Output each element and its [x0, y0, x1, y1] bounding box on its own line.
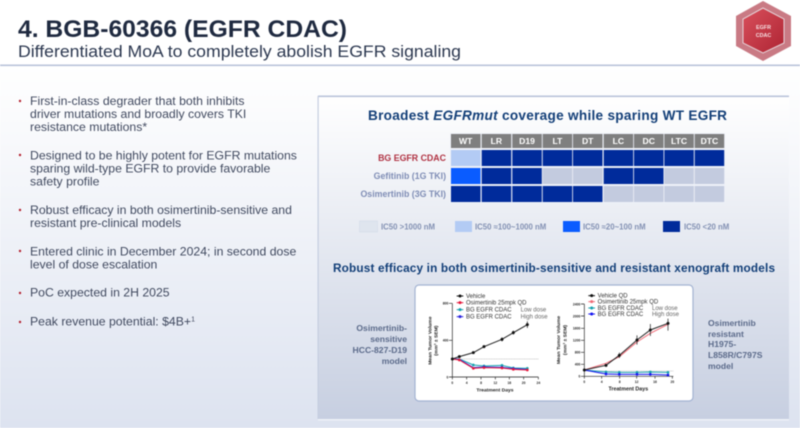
chart: osimertinib-resistant tumor volume: 400: [575, 363, 580, 367]
column headers: LR: [491, 136, 503, 146]
label: sensitive model: HCC-827-D19: [353, 345, 407, 355]
chart legend: Osimertinib 25mpk QD: [466, 301, 527, 307]
row: Osimertinib: Osimertinib (3G TKI): [360, 189, 446, 199]
chart: osimertinib-resistant tumor volume: 1600: [573, 327, 580, 331]
chart: osimertinib-sensitive tumor volume: 4: [466, 381, 468, 385]
heading: xenograft: Robust efficacy in both osimertinib-sensitive and resistant xenograft models: [333, 261, 775, 275]
icon: EGFR CDAC hexagon badge: EGFR: [756, 25, 771, 31]
label: sensitive model: Osimertinib-: [356, 323, 407, 333]
chart: osimertinib-sensitive tumor volume: 0: [446, 375, 448, 379]
bullet: designed to be potent: Designed to be highly potent for EGFR mutations: [30, 148, 297, 162]
chart: osimertinib-sensitive tumor volume: 800: [443, 302, 448, 306]
bullet: entered clinic: Entered clinic in December 2024; in second dose: [30, 244, 296, 258]
icon: EGFR CDAC hexagon badge: CDAC: [756, 33, 771, 39]
heatmap legend: [360, 221, 729, 232]
panel: chart card: [415, 285, 693, 401]
chart: osimertinib-sensitive tumor volume: 0: [451, 381, 453, 385]
column headers: D19: [519, 136, 535, 146]
subtitle: Differentiated MoA to completely abolish EGFR signaling: [18, 42, 461, 61]
chart: osimertinib-resistant tumor volume: 8: [619, 380, 621, 384]
bullet: designed to be potent: [19, 148, 297, 188]
chart: osimertinib-resistant tumor volume: (mm³ ± SEM): [563, 325, 569, 355]
column headers: DTC: [701, 136, 718, 146]
bullet: entered clinic: [19, 244, 296, 272]
column headers: [451, 134, 724, 148]
chart legend: Low dose: [652, 306, 678, 312]
chart legend: [588, 294, 680, 318]
column headers: LC: [613, 136, 624, 146]
chart: osimertinib-sensitive tumor volume: Mean Tumor Volume: [427, 316, 433, 365]
chart legend: BG EGFR CDAC: [598, 306, 644, 312]
label: resistant model: Osimertinib: [708, 318, 756, 328]
bullet: robust efficacy: resistant pre-clinical models: [30, 216, 181, 230]
bullet: first-in-class: First-in-class degrader that both inhibits: [30, 94, 244, 108]
chart legend: BG EGFR CDAC: [598, 312, 644, 318]
bullet: peak revenue: 1: [191, 316, 195, 324]
label: resistant model: H1975-: [708, 339, 736, 349]
heatmap table: [360, 133, 725, 203]
chart legend: High dose: [652, 312, 680, 318]
chart: osimertinib-sensitive tumor volume: 8: [480, 381, 482, 385]
heatmap legend: IC50 <20 nM: [684, 222, 729, 232]
icon: EGFR CDAC hexagon badge: [736, 1, 791, 61]
chart: osimertinib-resistant tumor volume: 20: [670, 380, 674, 384]
heatmap legend: IC50 >1000 nM: [381, 222, 435, 232]
bullet: designed to be potent: safety profile: [30, 174, 100, 188]
chart legend: BG EGFR CDAC: [466, 315, 512, 321]
chart legend: BG EGFR CDAC: [466, 307, 512, 313]
label: sensitive model: [353, 323, 407, 366]
column headers: LT: [552, 136, 563, 146]
label: sensitive model: model: [382, 356, 407, 366]
heatmap legend: IC50 ≈100~1000 nM: [475, 222, 546, 232]
row: Gefitinib: [374, 168, 724, 184]
title: 4. BGB-60366 (EGFR CDAC): [18, 16, 347, 43]
label: sensitive model: sensitive: [370, 334, 407, 344]
chart: osimertinib-resistant tumor volume: [556, 294, 680, 393]
chart: osimertinib-sensitive tumor volume: 400: [443, 339, 448, 343]
label: resistant model: model: [708, 361, 733, 371]
chart: osimertinib-sensitive tumor volume: (mm³ ± SEM): [433, 325, 439, 356]
label: resistant model: resistant: [708, 329, 744, 339]
chart legend: Osimertinib 25mpk QD: [598, 300, 659, 306]
chart legend: High dose: [521, 315, 548, 321]
chart: osimertinib-resistant tumor volume: 12: [635, 380, 639, 384]
chart: osimertinib-sensitive tumor volume: [427, 294, 548, 394]
row: Osimertinib: [360, 186, 724, 202]
bullet list: [19, 94, 297, 328]
column headers: DC: [642, 136, 655, 146]
column headers: LTC: [671, 136, 687, 146]
bullet: peak revenue: Peak revenue potential: $4B+: [30, 314, 191, 328]
chart: osimertinib-resistant tumor volume: 2400: [573, 302, 580, 306]
bullet: first-in-class: driver mutations and broadly covers TKI: [30, 107, 246, 121]
chart: osimertinib-resistant tumor volume: 800: [575, 351, 580, 355]
chart: osimertinib-sensitive tumor volume: 16: [507, 381, 511, 385]
chart legend: Low dose: [521, 307, 547, 313]
bullet: robust efficacy: Robust efficacy in both osimertinib-sensitive and: [30, 203, 292, 217]
chart: osimertinib-resistant tumor volume: 0: [578, 375, 580, 379]
row: Gefitinib: Gefitinib (1G TKI): [374, 171, 446, 181]
chart: osimertinib-resistant tumor volume: 4: [601, 380, 603, 384]
chart: osimertinib-resistant tumor volume: Treatment Days: [608, 387, 648, 393]
bullet: designed to be potent: sparing wild-type EGFR to provide favorable: [30, 162, 271, 176]
row: BG EGFR CDAC: [378, 150, 724, 166]
panel: right data panel: [318, 96, 789, 420]
bullet: first-in-class: resistance mutations*: [30, 120, 147, 134]
bullet: entered clinic: level of dose escalation: [30, 258, 158, 272]
chart: osimertinib-sensitive tumor volume: 20: [522, 381, 526, 385]
chart: osimertinib-sensitive tumor volume: 12: [493, 381, 497, 385]
label: resistant model: [708, 318, 763, 371]
column headers: WT: [459, 136, 473, 146]
label: resistant model: L858R/C797S: [708, 350, 763, 360]
chart: osimertinib-resistant tumor volume: 16: [653, 380, 657, 384]
chart legend: Vehicle QD: [598, 294, 628, 300]
chart: osimertinib-sensitive tumor volume: Treatment Days: [476, 388, 514, 394]
row: BG EGFR CDAC: BG EGFR CDAC: [378, 153, 447, 163]
chart: osimertinib-resistant tumor volume: 2000: [573, 314, 580, 318]
column headers: DT: [582, 136, 594, 146]
chart: osimertinib-resistant tumor volume: 1200: [573, 339, 580, 343]
bullet: robust efficacy: [19, 203, 292, 230]
chart: osimertinib-resistant tumor volume: Mean Tumor Volume: [556, 316, 562, 364]
bullet: first-in-class: [19, 94, 246, 134]
heatmap legend: IC50 ≈20~100 nM: [583, 222, 646, 232]
bullet: PoC: PoC expected in 2H 2025: [30, 286, 170, 300]
chart legend: Vehicle: [466, 294, 486, 300]
heading: coverage: Broadest EGFRmut coverage while sparing WT EGFR: [368, 108, 727, 123]
chart legend: [457, 294, 548, 321]
chart: osimertinib-resistant tumor volume: 0: [583, 380, 585, 384]
chart: osimertinib-sensitive tumor volume: 24: [536, 381, 540, 385]
